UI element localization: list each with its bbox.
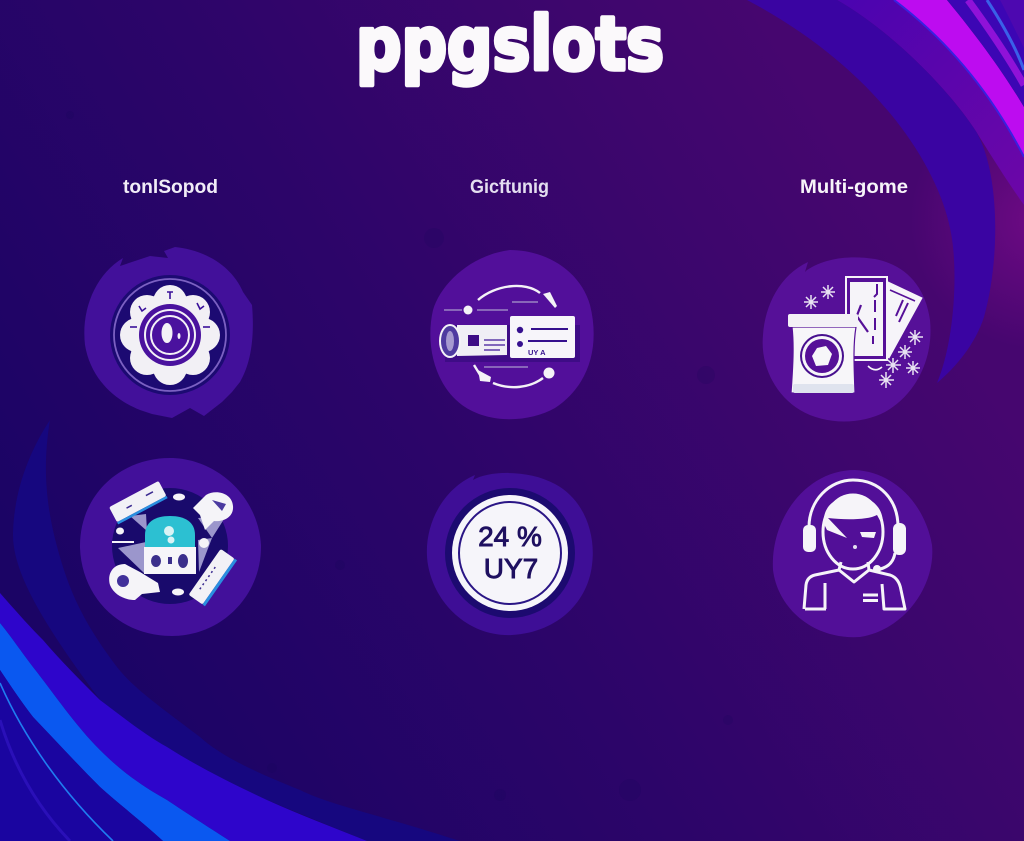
grey wedges — [118, 514, 226, 573]
ear cups — [803, 525, 816, 552]
icon: bag and cards — [763, 257, 931, 422]
icon: support agent with headset — [773, 470, 932, 637]
card — [510, 316, 575, 358]
icon: 24 % badge: UY7 — [484, 553, 538, 584]
teal screen — [145, 516, 195, 547]
icon: 24 % badge: 24 % — [478, 521, 542, 552]
title: ppgslots — [356, 2, 664, 88]
icon: 24 % badge — [427, 473, 593, 635]
icon: ticket card — [430, 250, 594, 419]
sparkles — [804, 285, 923, 388]
front card — [846, 277, 887, 360]
back card tilted — [880, 282, 922, 358]
flower petals — [120, 285, 220, 385]
icon: dial flower badge — [84, 247, 253, 418]
mic — [877, 553, 895, 570]
small white pieces — [112, 494, 209, 596]
icon: ticket card: UY A — [528, 348, 546, 357]
heading: column 2: Gicftunig — [470, 177, 549, 198]
swoosh: top right — [747, 0, 1024, 383]
headband — [809, 480, 898, 527]
icon: game console cluster — [80, 458, 261, 636]
swoosh: bottom left — [0, 420, 460, 841]
torso — [804, 570, 905, 609]
heading: column 1: tonlSopod — [123, 177, 218, 198]
white panel — [144, 547, 196, 574]
top-left controller — [109, 481, 168, 524]
cylinder — [457, 325, 507, 356]
arrows — [474, 286, 543, 387]
heading: column 3: Multi-gome — [800, 177, 908, 198]
bottom-right controller — [189, 549, 237, 606]
hair — [824, 496, 883, 538]
bag — [791, 327, 856, 393]
bottom-left blob — [109, 564, 160, 600]
neck — [839, 562, 869, 570]
face — [823, 495, 883, 569]
top-right blob — [193, 492, 233, 530]
petal ticks — [130, 292, 210, 327]
decorative faint specks — [66, 111, 733, 801]
